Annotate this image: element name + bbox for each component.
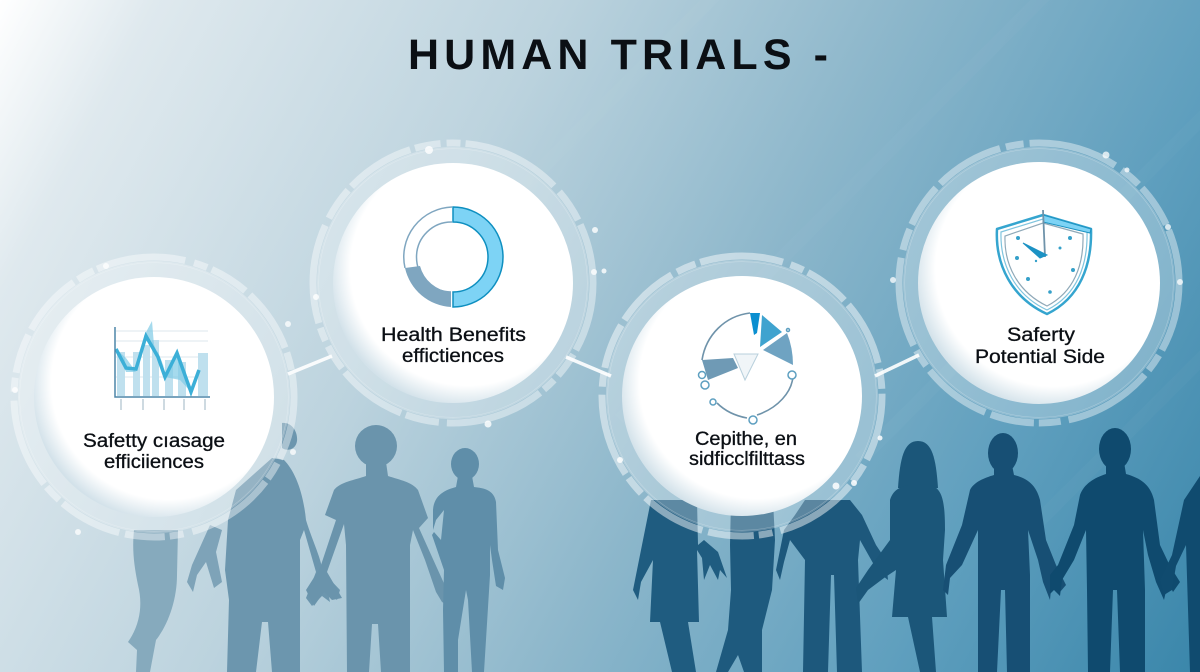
decorative dots	[12, 263, 296, 535]
label: Cepithe, en	[695, 429, 797, 450]
label: Saferty	[1007, 325, 1076, 346]
disc	[622, 276, 862, 516]
label: efficiiences	[104, 452, 204, 473]
title: HUMAN TRIALS -	[408, 31, 828, 79]
person: figure 2	[716, 500, 775, 672]
person: figure 1	[633, 500, 727, 672]
connector lines between circles	[288, 355, 919, 376]
icon: line and bar chart	[115, 321, 210, 410]
person: second figure	[225, 423, 340, 672]
label: effictiences	[402, 346, 504, 367]
label: Safetty cıasage	[83, 431, 225, 452]
ring	[602, 256, 882, 536]
label: sidficclfilttass	[689, 449, 805, 470]
label	[381, 325, 526, 367]
person: tall man	[1050, 428, 1180, 672]
person: crossed arm fragment	[187, 525, 222, 592]
ring	[313, 143, 593, 423]
decorative dots	[313, 146, 606, 428]
person: third figure	[306, 425, 449, 672]
person: woman with bob hair	[856, 441, 947, 672]
disc	[918, 162, 1160, 404]
person: fourth figure	[432, 448, 505, 672]
person: figure cut by right edge	[1160, 476, 1200, 672]
panel: safety potential side circle	[890, 143, 1183, 423]
label	[975, 325, 1105, 368]
person: far left figure	[128, 530, 178, 672]
label: Potential Side	[975, 347, 1105, 368]
panel: health benefits circle	[313, 143, 606, 428]
decorative dots	[617, 436, 882, 490]
ring	[14, 257, 294, 537]
disc	[34, 277, 274, 517]
panel: centre-right circle	[602, 256, 882, 536]
person: figure 3	[776, 500, 888, 672]
label	[83, 431, 225, 473]
label	[689, 429, 805, 470]
person: man with linked hands	[943, 433, 1066, 672]
decorative dots	[890, 152, 1183, 285]
silhouettes: faded group of people at left	[128, 423, 505, 672]
icon: donut chart	[404, 207, 503, 307]
label: Health Benefits	[381, 325, 526, 346]
icon: shield with clock	[997, 210, 1091, 314]
background light streaks	[380, 0, 1200, 560]
icon: radial pie dial	[698, 313, 796, 424]
disc	[333, 163, 573, 403]
ring	[899, 143, 1179, 423]
silhouettes: dark group of people at right	[633, 428, 1200, 672]
panel: safety circle	[12, 257, 296, 537]
